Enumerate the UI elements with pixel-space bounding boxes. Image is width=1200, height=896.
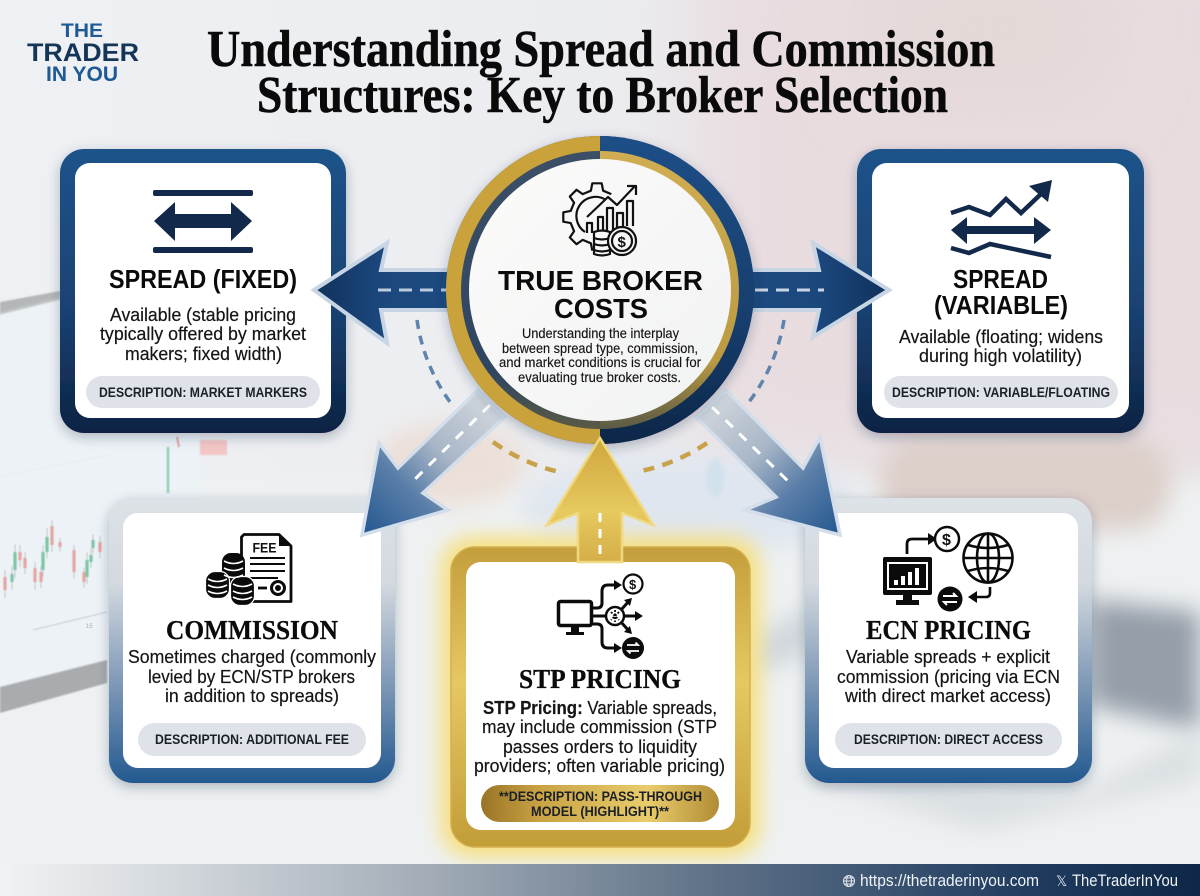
- arrow: to spread fixed: [314, 243, 452, 343]
- icon: stp order routing: $: [629, 577, 637, 592]
- panel: ecn pricing: ECN PRICING: [866, 615, 1031, 645]
- central circle: true broker costs: TRUE BROKER: [498, 265, 703, 296]
- panel: stp pricing (highlight): [441, 537, 760, 857]
- icon: ecn monitor, dollar and globe: [883, 527, 1013, 612]
- panel: stp pricing (highlight): may include commission (STP: [482, 717, 717, 737]
- panel: spread fixed: makers; fixed width): [125, 344, 282, 364]
- panel: stp pricing (highlight): **DESCRIPTION: PASS-THROUGH: [499, 789, 702, 804]
- panel: commission: in addition to spreads): [165, 686, 339, 706]
- icon: variable spread: [951, 180, 1052, 257]
- icon: gear, growth chart and coins: [563, 183, 636, 256]
- panel: stp pricing (highlight): MODEL (HIGHLIGHT)**: [531, 804, 670, 819]
- dashed connector arcs: [417, 320, 784, 473]
- icon: fee document and coins: [206, 534, 292, 606]
- icon: stp order routing: [558, 574, 644, 659]
- logo: The Trader In You: IN YOU: [46, 63, 118, 86]
- panel: spread variable: [857, 149, 1144, 433]
- icon: fixed spread arrows: [153, 190, 253, 253]
- central circle: true broker costs: evaluating true broker costs.: [518, 369, 681, 385]
- panel: commission: DESCRIPTION: ADDITIONAL FEE: [155, 732, 349, 747]
- panel: stp pricing (highlight): passes orders to liquidity: [503, 737, 697, 757]
- arrow: from stp pricing (gold): [547, 438, 653, 562]
- logo: The Trader In You: [27, 20, 139, 86]
- panel: spread fixed: [60, 149, 346, 433]
- panel: commission: COMMISSION: [166, 615, 338, 645]
- panel: spread fixed: Available (stable pricing: [110, 305, 296, 325]
- panel: commission: [109, 498, 395, 783]
- central circle: true broker costs: Understanding the interplay: [522, 325, 679, 341]
- panel: spread fixed: DESCRIPTION: MARKET MARKERS: [99, 385, 307, 400]
- icon: fee document and coins: FEE: [252, 540, 276, 556]
- panel: commission: levied by ECN/STP brokers: [148, 667, 355, 687]
- background: blurred trading desk photo: 15: [86, 624, 93, 630]
- central circle: true broker costs: [446, 136, 754, 444]
- footer bar: https://thetraderinyou.com: [860, 871, 1039, 890]
- panel: spread variable: SPREAD: [953, 264, 1048, 294]
- panel: spread fixed: typically offered by market: [100, 324, 306, 344]
- central circle: true broker costs: COSTS: [554, 293, 648, 324]
- logo: The Trader In You: THE: [61, 20, 103, 42]
- footer bar: [0, 864, 1200, 896]
- icon: ecn monitor, dollar and globe: $: [942, 532, 951, 549]
- arrow: to spread variable: [748, 243, 889, 337]
- panel: ecn pricing: Variable spreads + explicit: [846, 647, 1050, 667]
- panel: spread variable: Available (floating; widens: [899, 327, 1103, 347]
- panel: spread variable: (VARIABLE): [934, 290, 1068, 320]
- title: [207, 21, 995, 124]
- panel: spread fixed: SPREAD (FIXED): [109, 264, 297, 294]
- panel: ecn pricing: DESCRIPTION: DIRECT ACCESS: [854, 732, 1043, 747]
- panel: ecn pricing: [805, 498, 1092, 783]
- panel: stp pricing (highlight): STP PRICING: [519, 664, 681, 694]
- panel: stp pricing (highlight): providers; often variable pricing): [474, 756, 725, 776]
- central circle: true broker costs: between spread type, commission,: [502, 340, 698, 356]
- footer bar: TheTraderInYou: [1072, 871, 1178, 890]
- panel: ecn pricing: with direct market access): [844, 686, 1051, 706]
- arrow: to ecn pricing: [696, 390, 840, 535]
- central circle: true broker costs: and market conditions is crucial for: [499, 354, 701, 370]
- central circle: true broker costs: $: [618, 234, 626, 251]
- footer bar: 𝕏: [1056, 874, 1067, 890]
- panel: commission: Sometimes charged (commonly: [128, 647, 376, 667]
- panel: ecn pricing: commission (pricing via ECN: [837, 667, 1060, 687]
- title: Structures: Key to Broker Selection: [257, 67, 948, 124]
- icon: globe: [844, 876, 854, 886]
- panel: spread variable: during high volatility): [919, 346, 1082, 366]
- panel: spread variable: DESCRIPTION: VARIABLE/FLOATING: [892, 385, 1110, 400]
- title: Understanding Spread and Commission: [207, 21, 995, 78]
- panel: stp pricing (highlight): STP Pricing: Variable spreads,: [483, 698, 717, 718]
- logo: The Trader In You: TRADER: [27, 39, 139, 67]
- arrow: to commission: [362, 390, 505, 535]
